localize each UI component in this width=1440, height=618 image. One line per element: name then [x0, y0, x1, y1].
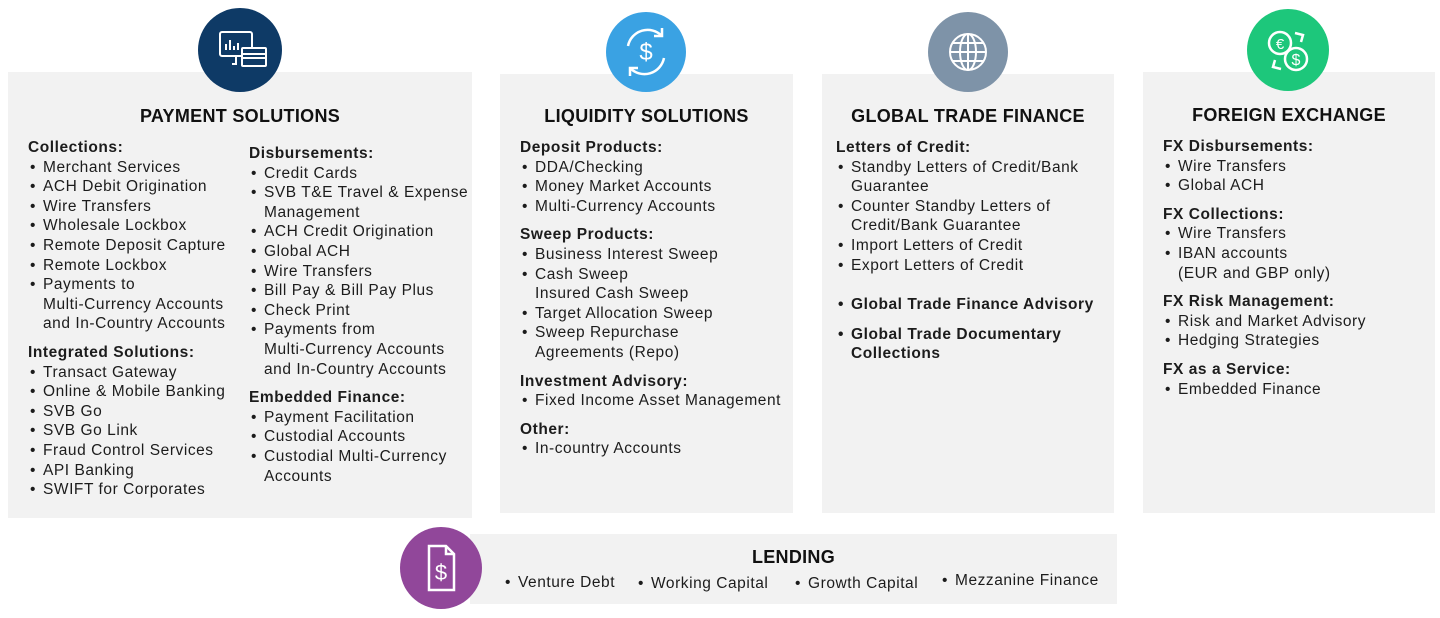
icon: liquidity [606, 12, 686, 92]
title: lending: LENDING [752, 547, 835, 567]
text: payment col 1: Remote Deposit Capture [43, 237, 226, 254]
text: payment col 2: Check Print [264, 302, 350, 319]
text: global trade: Global Trade Finance Advisory [851, 296, 1094, 313]
text: foreign exchange: Wire Transfers [1178, 225, 1286, 242]
text: payment col 1: Wholesale Lockbox [43, 217, 187, 234]
text: liquidity: Agreements (Repo) [535, 344, 680, 361]
text: payment col 1: Transact Gateway [43, 364, 177, 381]
text: foreign exchange [1163, 138, 1366, 398]
text: foreign exchange: Risk and Market Advisory [1178, 313, 1366, 330]
text: payment col 1: Wire Transfers [43, 198, 151, 215]
text: global trade: Collections [851, 345, 941, 362]
text: lending items [506, 572, 1099, 592]
text: payment col 1: ACH Debit Origination [43, 178, 207, 195]
text: payment col 1 [28, 139, 226, 498]
text: payment col 1: API Banking [43, 462, 134, 478]
text: payment col 2: Payment Facilitation [264, 409, 415, 426]
text: liquidity: Other: [520, 421, 570, 438]
title: global trade finance: GLOBAL TRADE FINANCE [851, 106, 1085, 126]
icon: globe [928, 12, 1008, 92]
text: Mezzanine Finance [955, 572, 1099, 589]
text: payment col 2 [249, 145, 468, 484]
text: payment col 1: and In-Country Accounts [43, 315, 225, 332]
icon: foreign exchange [1247, 9, 1329, 91]
text: payment col 1: Payments to [43, 276, 135, 293]
text: payment col 2: Management [264, 204, 360, 221]
title: liquidity solutions: LIQUIDITY SOLUTIONS [544, 106, 749, 126]
text: global trade: Counter Standby Letters of [851, 198, 1051, 215]
text: foreign exchange: (EUR and GBP only) [1178, 265, 1331, 282]
title: payment solutions: PAYMENT SOLUTIONS [140, 106, 340, 126]
text: payment col 2: Multi-Currency Accounts [264, 341, 445, 358]
text: foreign exchange: FX Disbursements: [1163, 138, 1314, 155]
text: foreign exchange: Wire Transfers [1178, 158, 1286, 175]
text: global trade: Letters of Credit: [836, 139, 971, 156]
text: foreign exchange: FX as a Service: [1163, 361, 1291, 378]
text: payment col 2: Wire Transfers [264, 263, 372, 280]
text: payment col 1: Fraud Control Services [43, 442, 214, 459]
text: foreign exchange: FX Collections: [1163, 206, 1284, 223]
text: payment col 2: Payments from [264, 321, 375, 338]
icon: lending [400, 527, 482, 609]
text: payment col 2: Disbursements: [249, 145, 374, 162]
text: payment col 2: Embedded Finance: [249, 389, 406, 406]
text: liquidity: Target Allocation Sweep [535, 305, 713, 322]
text: global trade: Credit/Bank Guarantee [851, 217, 1021, 234]
icon: payment [198, 8, 282, 92]
icon: foreign exchange: $ [1292, 52, 1301, 69]
text: foreign exchange: FX Risk Management: [1163, 293, 1335, 310]
panel: payment solutions [8, 72, 472, 518]
text: Venture Debt [518, 574, 615, 591]
text: payment col 2: and In-Country Accounts [264, 361, 446, 378]
text: liquidity: Insured Cash Sweep [535, 285, 689, 302]
text: payment col 1: Multi-Currency Accounts [43, 296, 224, 313]
text: liquidity: Deposit Products: [520, 139, 663, 156]
text: global trade: Standby Letters of Credit/Bank [851, 159, 1079, 176]
text: payment col 2: Custodial Accounts [264, 428, 406, 445]
text: liquidity: Investment Advisory: [520, 373, 688, 390]
text: payment col 1: Collections: [28, 139, 123, 156]
text: payment col 2: ACH Credit Origination [264, 223, 434, 240]
text: payment col 2: Accounts [264, 468, 332, 484]
text: liquidity: DDA/Checking [535, 159, 643, 176]
text: payment col 1: SVB Go [43, 403, 102, 420]
panel: lending [470, 534, 1117, 604]
title: foreign exchange: FOREIGN EXCHANGE [1192, 105, 1386, 125]
text: payment col 2: Custodial Multi-Currency [264, 448, 447, 465]
text: liquidity: Cash Sweep [535, 266, 628, 283]
text: liquidity: In-country Accounts [535, 440, 682, 457]
text: payment col 1: Remote Lockbox [43, 257, 167, 274]
text: payment col 1: SWIFT for Corporates [43, 481, 205, 498]
text: liquidity: Money Market Accounts [535, 178, 712, 195]
text: foreign exchange: Embedded Finance [1178, 381, 1321, 398]
text: payment col 1: Online & Mobile Banking [43, 383, 225, 400]
text: foreign exchange: IBAN accounts [1178, 245, 1288, 262]
text: liquidity: Sweep Products: [520, 226, 654, 243]
text: Growth Capital [808, 575, 918, 592]
text: global trade: Import Letters of Credit [851, 237, 1023, 254]
text: Working Capital [651, 575, 768, 592]
text: global trade [836, 139, 1094, 362]
text: liquidity: Fixed Income Asset Management [535, 392, 781, 409]
text: liquidity: Multi-Currency Accounts [535, 198, 716, 215]
text: payment col 1: Integrated Solutions: [28, 344, 195, 361]
text: global trade: Guarantee [851, 178, 929, 195]
text: liquidity: Sweep Repurchase [535, 324, 679, 341]
text: global trade: Export Letters of Credit [851, 257, 1024, 274]
text: global trade: Global Trade Documentary [851, 326, 1061, 343]
panel: foreign exchange [1143, 72, 1435, 513]
text: payment col 1: Merchant Services [43, 159, 181, 176]
text: payment col 2: Global ACH [264, 243, 350, 260]
icon: liquidity: $ [639, 39, 653, 66]
text: payment col 2: SVB T&E Travel & Expense [264, 184, 468, 201]
text: payment col 1: SVB Go Link [43, 422, 138, 439]
icon: foreign exchange: € [1276, 36, 1285, 53]
text: foreign exchange: Global ACH [1178, 177, 1264, 194]
text: payment col 2: Credit Cards [264, 165, 358, 182]
panel: liquidity solutions [500, 74, 793, 513]
text: payment col 2: Bill Pay & Bill Pay Plus [264, 282, 434, 299]
text: foreign exchange: Hedging Strategies [1178, 332, 1320, 349]
text: liquidity: Business Interest Sweep [535, 246, 718, 263]
text: liquidity [520, 139, 781, 457]
icon: lending: $ [435, 560, 447, 585]
panel: global trade finance [822, 74, 1114, 513]
